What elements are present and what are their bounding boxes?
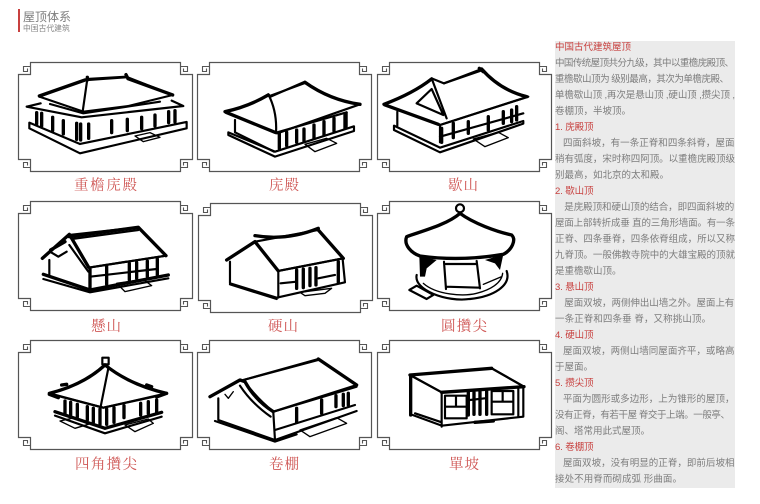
icon: gable-and-hip roof building <box>384 68 528 152</box>
text block: introduction: 重檐歇山顶为 级别最高，其次为单檐庑殿、 <box>555 73 729 85</box>
text block: section 2: 是庑殿顶和硬山顶的结合，即四面斜坡的 <box>564 201 734 213</box>
text block: section 5: 没有正脊，有若干屋 脊交于上端。一般亭、 <box>555 409 730 421</box>
text block: section 1: 四面斜坡，有一条正脊和四条斜脊，屋面 <box>563 137 734 149</box>
text block: section 2: 屋面上部转折成垂 直的三角形墙面。有一条 <box>555 217 735 229</box>
text block: section 1 <box>555 137 735 181</box>
text block: introduction: 卷棚顶，半坡顶。 <box>555 105 631 117</box>
icon: single-slope building <box>410 368 524 427</box>
caption: 单坡: 單坡 <box>449 456 480 473</box>
text block: section 2: 九脊顶。一般佛教寺院中的大雄宝殿的顶就 <box>555 249 735 261</box>
caption: 硬山: 硬山 <box>268 318 298 335</box>
title block <box>18 9 71 33</box>
panel: hip roof <box>198 62 372 172</box>
panel: roof text sidebar <box>555 41 735 488</box>
text block: section 6 <box>555 457 734 485</box>
panel: round pyramidal roof <box>378 202 552 310</box>
caption: 歇山: 歇山 <box>448 177 478 194</box>
text block: section 1: 别最高，如北京的太和殿。 <box>555 169 669 181</box>
panel: round-ridge roof <box>198 340 372 450</box>
text block: section 1: 稍有弧度，宋时称四阿顶。以重檐庑殿顶级 <box>555 153 735 165</box>
text block: introduction <box>555 57 735 117</box>
icon: square pavilion <box>49 358 167 433</box>
text block: section 3 <box>555 297 734 325</box>
text block: section 6: 屋面双坡，没有明显的正脊，即前后坡相 <box>563 457 734 469</box>
text block: section 4: 屋面双坡，两侧山墙同屋面齐平，或略高 <box>563 345 734 357</box>
heading: 2: 2. 歇山顶 <box>555 185 594 197</box>
icon: double-eave hip roof building <box>27 75 187 153</box>
icon: overhanging gable building <box>42 227 168 292</box>
text block: section 4 <box>555 345 734 373</box>
panel: double-eave hip roof <box>18 62 192 172</box>
icon: flush gable building <box>227 228 345 299</box>
text block: introduction: 单檐歇山顶 ,再次是悬山顶 ,硬山顶 ,攒尖顶 , <box>555 89 735 101</box>
text block: section 2: 是重檐歇山顶。 <box>555 265 622 277</box>
caption: 卷棚: 卷棚 <box>269 456 299 473</box>
caption: 圆攒尖: 圓攢尖 <box>441 317 488 335</box>
text block: introduction: 中国传统屋顶共分九级，其中以重檐庑殿顶、 <box>555 57 734 69</box>
panel: overhanging gable roof <box>18 202 192 310</box>
heading: 5: 5. 攒尖顶 <box>555 377 594 389</box>
caption: 四角攒尖: 四角攢尖 <box>75 455 138 473</box>
text block: section 3: 屋面双坡，两侧伸出山墙之外。屋面上有 <box>564 297 734 309</box>
text block: section 2 <box>555 201 735 277</box>
text block: section 5 <box>555 393 734 437</box>
text block: section 5: 阁、塔常用此式屋顶。 <box>555 425 650 437</box>
caption: 庑殿: 庑殿 <box>269 177 300 194</box>
panel: square pyramidal roof <box>18 340 192 450</box>
text block: section 4: 于屋面。 <box>555 362 593 373</box>
heading: 6: 6. 卷棚顶 <box>555 441 594 453</box>
heading: 中国古代建筑屋顶: 中国古代建筑屋顶 <box>555 41 631 53</box>
title block: 中国古代建筑 <box>23 23 70 33</box>
text block: section 6: 接处不用脊而砌成弧 形曲面。 <box>555 473 682 485</box>
icon: round pavilion <box>406 204 514 300</box>
title block: 屋顶体系 <box>23 10 71 24</box>
heading: 4: 4. 硬山顶 <box>555 330 594 341</box>
panel: flush gable roof <box>198 204 372 312</box>
caption: 重檐庑殿: 重檐庑殿 <box>74 176 138 194</box>
text block: section 2: 正脊、四条垂脊，四条依脊组成，所以又称 <box>555 233 735 245</box>
heading: 1: 1. 庑殿顶 <box>555 121 594 133</box>
text block: section 5: 平面为圆形或多边形，上为锥形的屋顶， <box>563 393 734 405</box>
text block: section 3: 一条正脊和四条垂 脊，又称挑山顶。 <box>555 313 711 325</box>
caption: 悬山: 懸山 <box>91 318 121 335</box>
heading: 3: 3. 悬山顶 <box>555 282 594 293</box>
panel: gable-and-hip roof <box>378 62 552 172</box>
icon: hip roof building <box>225 82 360 157</box>
panel: single-slope roof <box>378 340 552 450</box>
icon: round-ridge building <box>210 359 357 442</box>
